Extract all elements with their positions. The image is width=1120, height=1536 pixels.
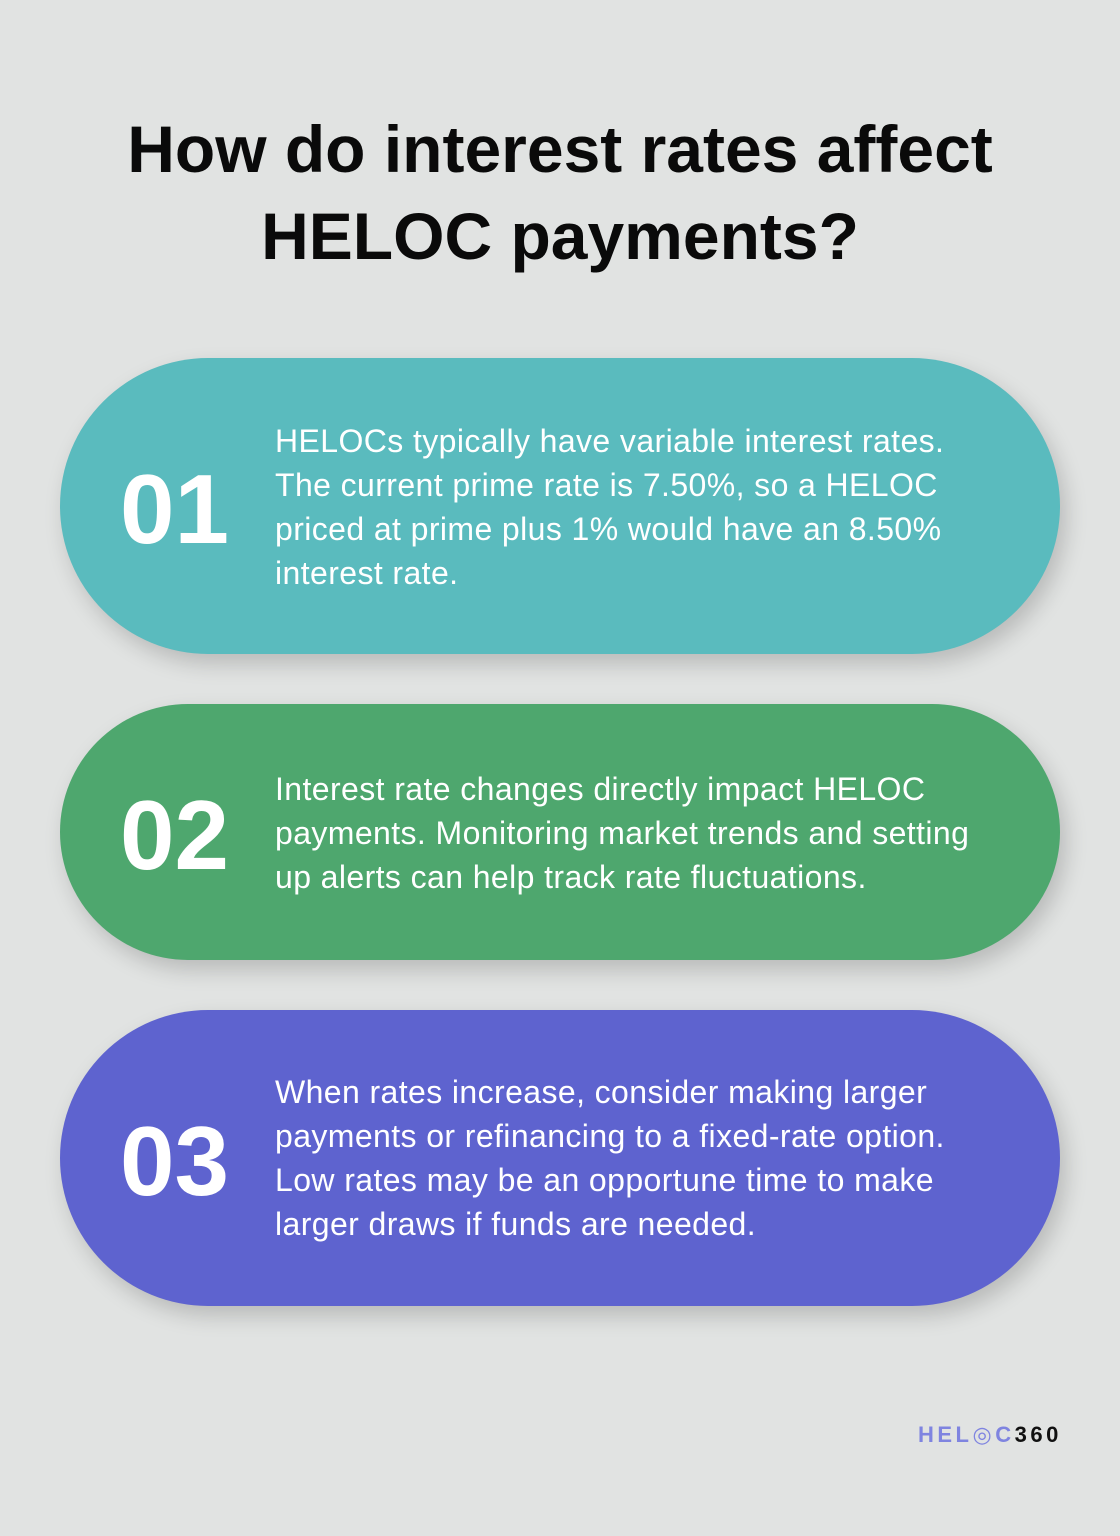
panel: 03: [60, 1010, 1060, 1306]
text 01: HELOCs typically have variable interest rates.: [275, 423, 944, 459]
title: [127, 112, 993, 273]
text 01: interest rate.: [275, 555, 458, 591]
text 03: When rates increase, consider making larger: [275, 1074, 927, 1110]
panel: 02: [60, 704, 1060, 960]
text 02: Interest rate changes directly impact HELOC: [275, 771, 925, 807]
text 03: Low rates may be an opportune time to make: [275, 1162, 934, 1198]
text 02: payments. Monitoring market trends and setting: [275, 815, 969, 851]
number 03: 03: [120, 1106, 229, 1216]
title: HELOC payments?: [261, 199, 859, 273]
text 03: payments or refinancing to a fixed-rate option.: [275, 1118, 945, 1154]
text 01: The current prime rate is 7.50%, so a HELOC: [275, 467, 938, 503]
number 02: 02: [120, 780, 229, 890]
title: How do interest rates affect: [127, 112, 993, 186]
logo: HEL◎C360: [918, 1422, 1062, 1447]
text 02: [275, 771, 969, 895]
text 01: [275, 423, 944, 591]
panel: 01: [60, 358, 1060, 654]
text 02: up alerts can help track rate fluctuations.: [275, 859, 867, 895]
text 03: larger draws if funds are needed.: [275, 1206, 756, 1242]
number 01: 01: [120, 454, 229, 564]
text 03: [275, 1074, 945, 1242]
text 01: priced at prime plus 1% would have an 8.50%: [275, 511, 941, 547]
